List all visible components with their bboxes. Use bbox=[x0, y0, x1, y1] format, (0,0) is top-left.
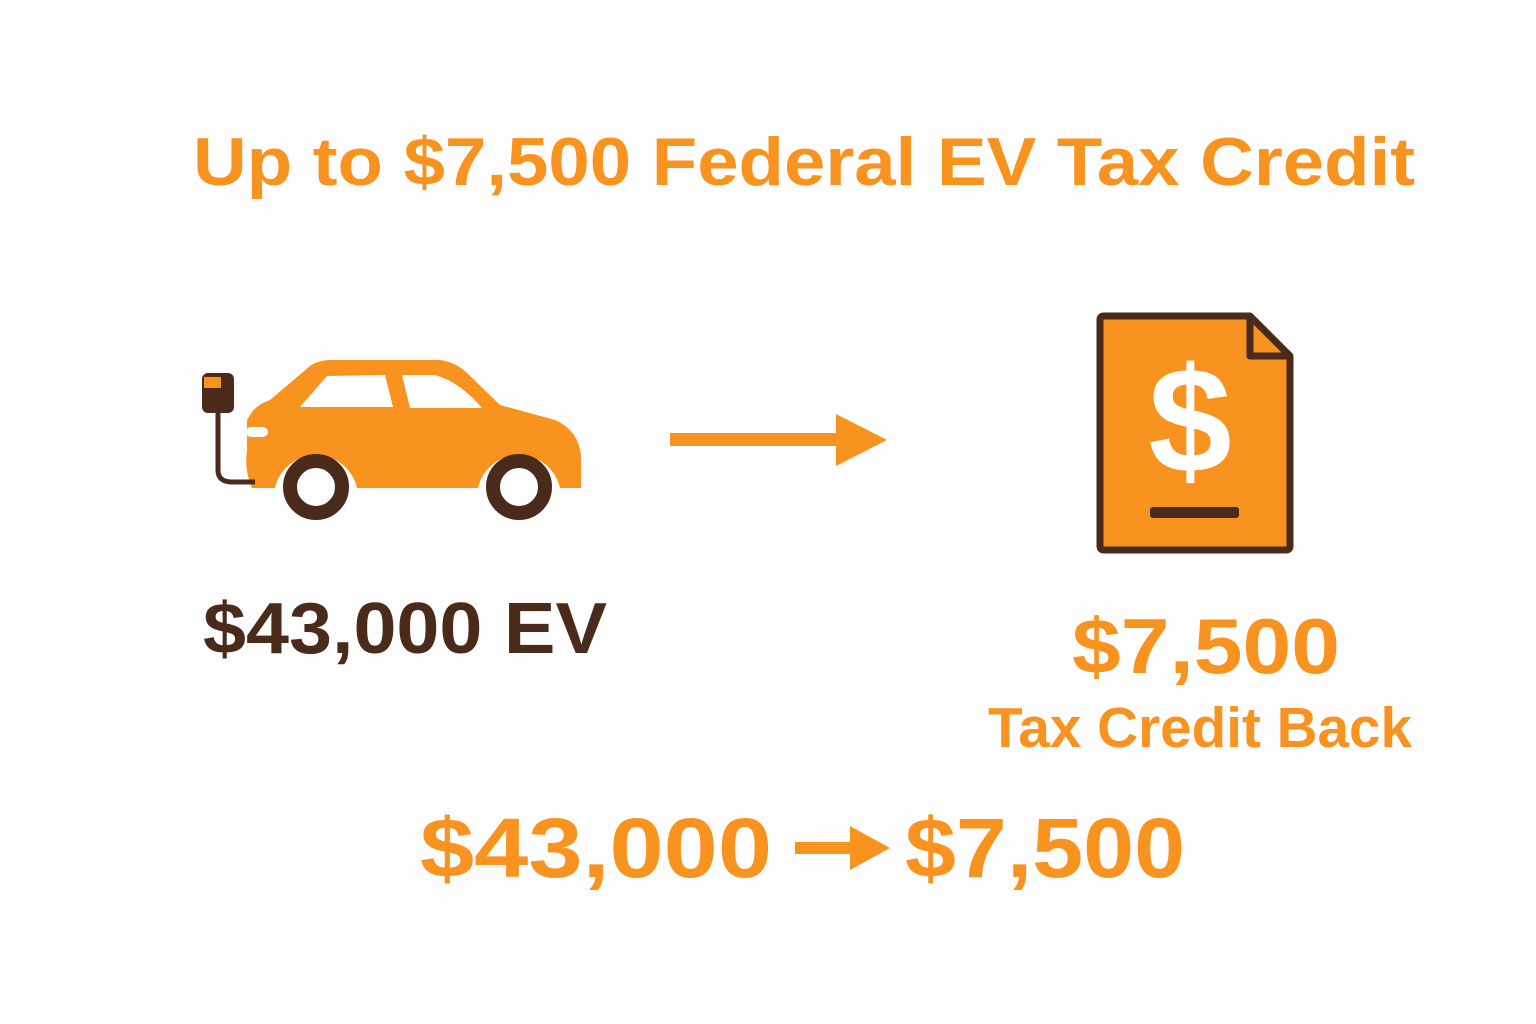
wheels bbox=[290, 461, 342, 513]
plug and cable bbox=[218, 410, 255, 482]
icon: tax document bbox=[1100, 316, 1290, 550]
summary equation bbox=[420, 801, 1185, 895]
label: tax credit back: Tax Credit Back bbox=[988, 696, 1412, 760]
arrow: car to credit bbox=[670, 414, 887, 466]
arrow: summary bbox=[795, 826, 890, 870]
icon: tax document: $ bbox=[1148, 336, 1232, 504]
summary equation: $7,500 bbox=[905, 801, 1185, 895]
icon: electric car bbox=[202, 360, 581, 513]
car body bbox=[246, 360, 581, 488]
label: credit amount: $7,500 bbox=[1072, 602, 1340, 690]
summary equation: $43,000 bbox=[420, 801, 772, 895]
label: EV price: $43,000 EV bbox=[203, 589, 607, 669]
title: Up to $7,500 Federal EV Tax Credit bbox=[193, 124, 1415, 200]
